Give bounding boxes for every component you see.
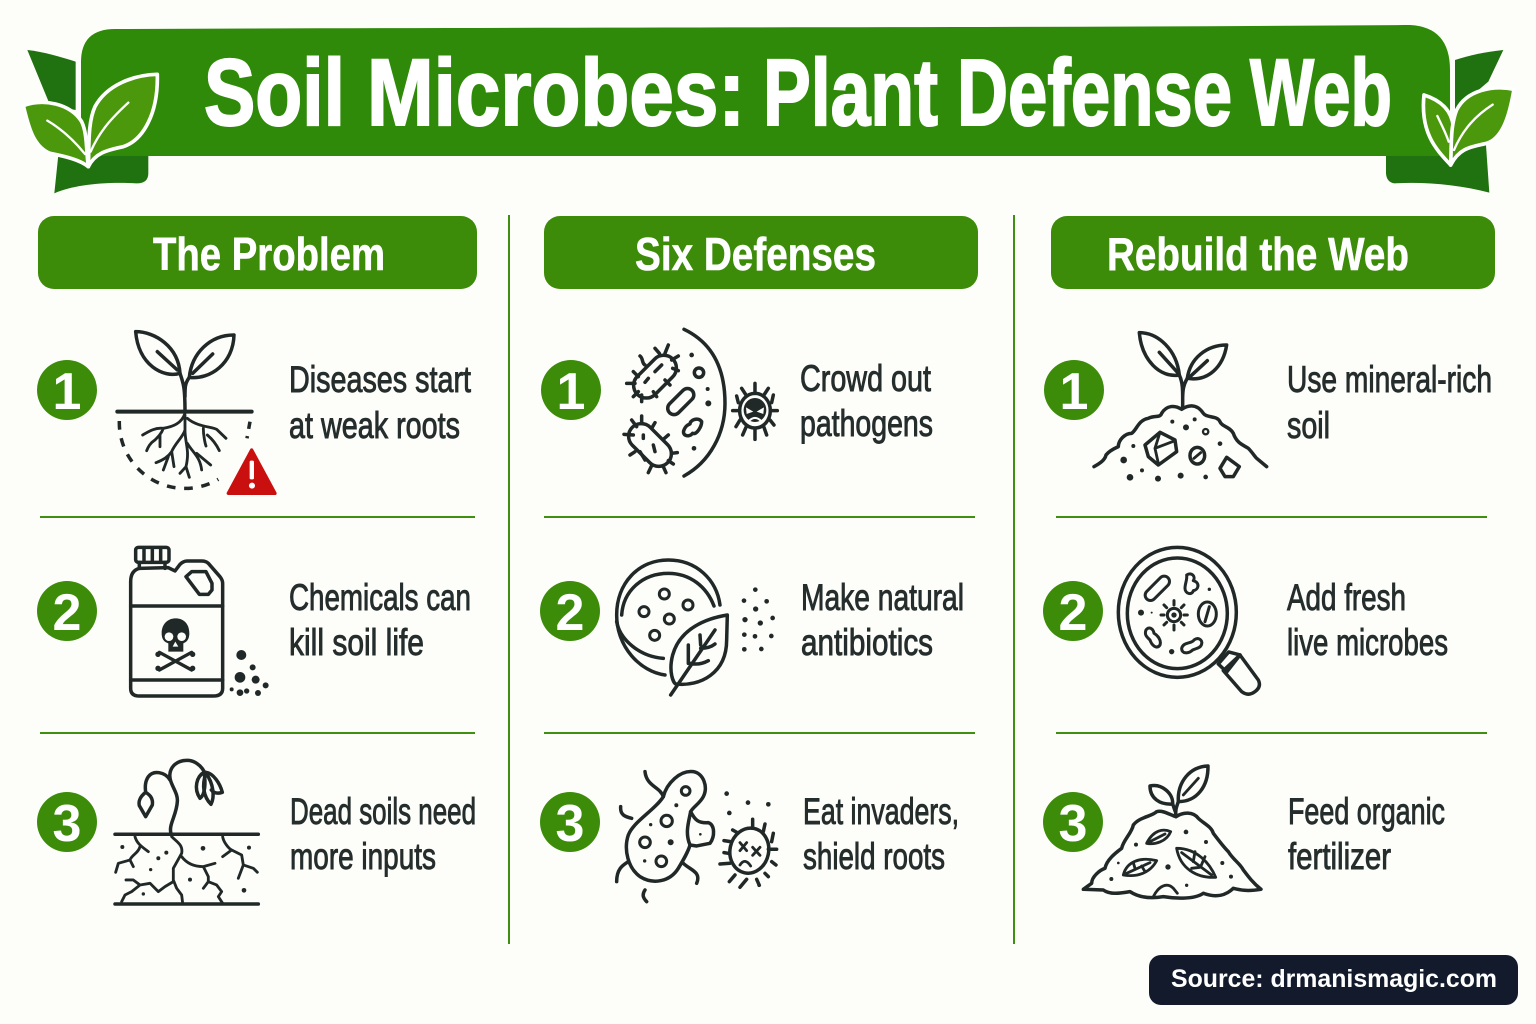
text: row 2: Make natural [801, 577, 964, 618]
icon: amoeba eating invader [617, 772, 777, 902]
number badge 1: 1 [1060, 363, 1088, 421]
number badge 1: 1 [557, 363, 585, 421]
title text: Soil [204, 40, 345, 146]
text: row 1: at weak roots [289, 405, 460, 446]
number badge 3: 3 [556, 795, 584, 853]
number badge 1 [541, 360, 601, 421]
heading: Rebuild the Web: Rebuild the Web [1107, 228, 1409, 280]
icon: left leaves [23, 74, 157, 167]
right ribbon tails [1386, 50, 1503, 193]
text: row 2: kill soil life [289, 622, 424, 663]
panel: Rebuild the Web [1043, 216, 1495, 898]
heading: Six Defenses [544, 216, 978, 289]
text: row 3 [803, 791, 959, 877]
icon: sprout on compost pile [1083, 766, 1261, 898]
text: row 1: Diseases start [289, 359, 472, 400]
text: row 3: fertilizer [1288, 836, 1391, 877]
text: row 3 [290, 791, 476, 877]
text: row 2: antibiotics [801, 622, 933, 663]
text: row 2 [1287, 577, 1448, 663]
left ribbon tails [27, 50, 148, 193]
number badge 3 [540, 792, 600, 853]
text: row 3: Feed organic [1288, 791, 1445, 832]
banner band [81, 25, 1450, 156]
source badge: Source: drmanismagic.com [1171, 965, 1497, 993]
number badge 2 [540, 581, 600, 642]
heading: Six Defenses: Six Defenses [635, 228, 876, 280]
text: row 2: Chemicals can [289, 577, 471, 618]
title text: Plant [763, 40, 938, 146]
number badge 3 [37, 792, 97, 853]
heading: The Problem [38, 216, 477, 289]
text: row 1 [800, 358, 933, 444]
title text: Web [1250, 40, 1392, 146]
number badge 3: 3 [1059, 795, 1087, 853]
number badge 1 [37, 360, 97, 421]
text: row 3 [1288, 791, 1445, 877]
text: row 3: shield roots [803, 836, 945, 877]
title banner [23, 25, 1514, 193]
heading: The Problem: The Problem [153, 228, 385, 280]
text: row 2 [289, 577, 471, 663]
icon: plant with weak roots and warning [117, 332, 275, 493]
title text [204, 40, 1392, 146]
column dividers [40, 215, 1487, 944]
text: row 3: Dead soils need [290, 791, 476, 832]
icon: microbes crowding out pathogen [623, 329, 777, 476]
number badge 2 [37, 581, 97, 642]
text: row 1: soil [1287, 405, 1330, 446]
text: row 1 [289, 359, 472, 446]
text: row 1: pathogens [800, 403, 933, 444]
number badge 2 [1043, 581, 1103, 642]
number badge 1 [1044, 360, 1104, 421]
text: row 2: live microbes [1287, 622, 1448, 663]
text: row 2: Add fresh [1287, 577, 1406, 618]
number badge 2: 2 [1059, 584, 1087, 642]
title text: Defense [957, 40, 1232, 146]
number badge 3: 3 [53, 795, 81, 853]
number badge 2: 2 [53, 584, 81, 642]
text: row 2 [801, 577, 964, 663]
icon: magnifier with microbes [1118, 547, 1259, 694]
heading: Rebuild the Web [1051, 216, 1495, 289]
icon: sprout on mineral soil [1094, 333, 1267, 482]
icon: chemical jug with skull [131, 547, 269, 696]
icon: right leaves [1423, 88, 1514, 165]
text: row 1: Crowd out [800, 358, 932, 399]
icon: wilted plant in cracked soil [115, 760, 258, 904]
text: row 1 [1287, 359, 1492, 446]
text: row 3: Eat invaders, [803, 791, 959, 832]
number badge 3 [1043, 792, 1103, 853]
panel: Six Defenses [540, 216, 978, 902]
number badge 1: 1 [53, 363, 81, 421]
number badge 2: 2 [556, 584, 584, 642]
text: row 3: more inputs [290, 836, 436, 877]
source badge [1149, 955, 1518, 1005]
title text: Microbes: [367, 40, 745, 146]
panel: The Problem [37, 216, 477, 904]
icon: petri dish with leaf [617, 560, 775, 695]
